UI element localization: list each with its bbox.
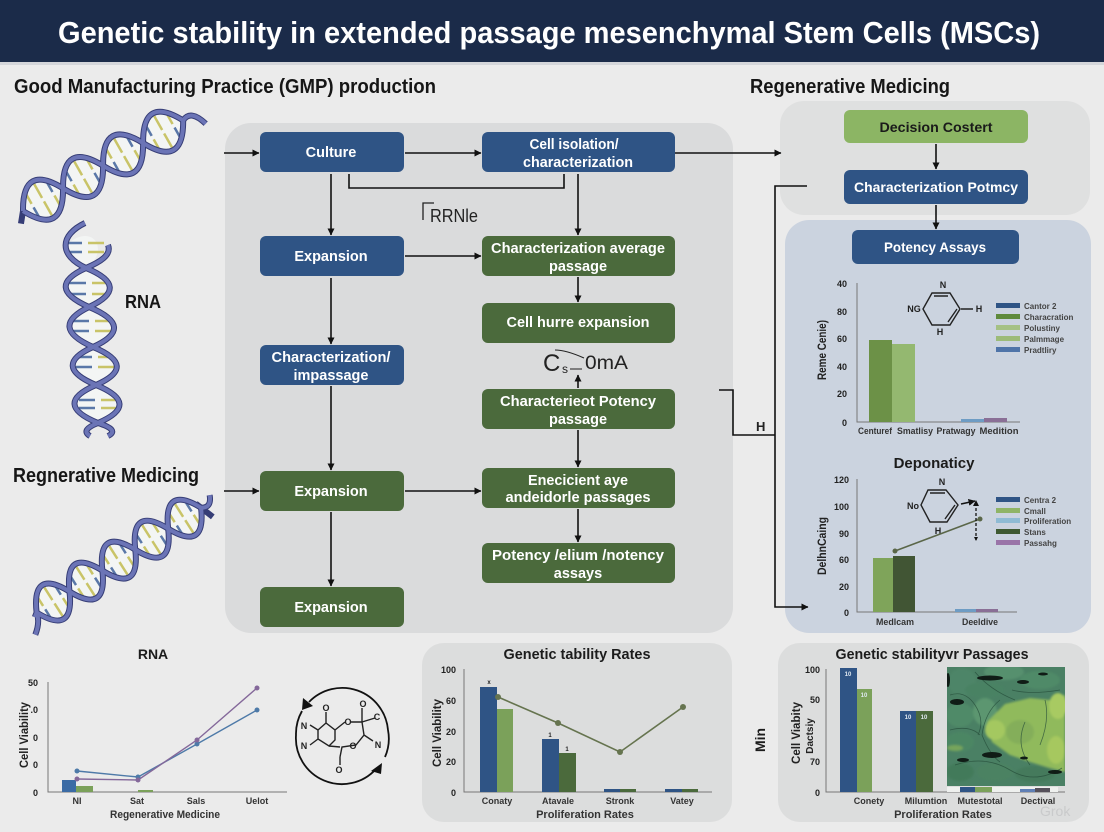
bar chart: passages: Milumtion — [905, 796, 947, 806]
bar chart: potency: 20 — [837, 389, 847, 399]
arrows: trend markers — [892, 500, 982, 554]
step: Cell isolation — [482, 132, 675, 172]
molecule: ring one: NG — [907, 304, 921, 314]
step: Characterization average passage — [482, 236, 675, 276]
bar chart: deponaticy: Medlcam — [876, 617, 914, 627]
step: Culture — [260, 132, 404, 172]
bar chart: rates: 100 — [441, 665, 456, 675]
step: Cell isolation: Cell isolation/ — [530, 137, 618, 153]
bar chart: deponaticy: DelhnCaing — [815, 517, 829, 575]
bar chart: passages: 70 — [810, 757, 820, 767]
line chart: RNA cell viability: 50 — [28, 678, 38, 688]
panel: genetic stability passages — [778, 643, 1089, 822]
label: RRNle: RRNle — [430, 206, 478, 226]
legend: deponaticy: Passahg — [1024, 539, 1057, 548]
step: Characterization impassage: Characterization/ — [272, 350, 390, 366]
legend: potency: Pradtliry — [1024, 346, 1057, 355]
step: Characterization average passage: passage — [549, 259, 607, 275]
bar chart: rates: Proliferation Rates — [536, 809, 634, 821]
legend: potency: Characration — [1024, 313, 1073, 322]
bar chart: passages: Dactsiy — [805, 718, 816, 754]
heading: regenerative medicine right: Regenerative Medicing — [750, 76, 950, 98]
bar chart: potency: Reme Cenie) — [815, 320, 829, 380]
bar chart: rates: x — [487, 680, 491, 686]
step: Enecicient passages: Enecicient aye — [528, 473, 628, 489]
step: Enecicient passages — [482, 468, 675, 508]
label: RNA: RNA — [125, 292, 161, 312]
box: Characterization Potmcy: Characterization Potmcy — [854, 179, 1018, 195]
bar chart: potency: 0 — [842, 418, 847, 428]
bar chart: rates: 60 — [446, 696, 456, 706]
step: Characterization impassage — [260, 345, 404, 385]
bar chart: deponaticy: 0 — [844, 608, 849, 618]
bar chart: potency: 40 — [837, 362, 847, 372]
step: Potency assays: Potency /elium /notency — [492, 548, 664, 564]
bar chart: rates: Conaty — [482, 796, 512, 806]
legend: deponaticy: Centra 2 — [1024, 496, 1057, 505]
legend: potency: Palmmage — [1024, 335, 1065, 344]
bar chart: potency: Smatlisy — [897, 426, 933, 436]
bar chart: passages: Mutestotal — [958, 796, 1002, 806]
bar chart: potency: Pratwagy — [936, 426, 976, 436]
bar chart: deponaticy — [815, 475, 1071, 627]
heading: RNA chart: RNA — [138, 646, 168, 662]
step: Expansion blue: Expansion — [294, 249, 368, 265]
line chart: RNA cell viability — [17, 678, 287, 821]
bar chart: rates: Cell Viability — [430, 699, 444, 767]
bar chart: passages: 50 — [810, 695, 820, 705]
bar chart: deponaticy: Deeldive — [962, 617, 998, 627]
molecule: ring one: N — [940, 280, 946, 290]
line chart: RNA cell viability: .0 — [30, 705, 38, 715]
heading: Genetic tability Rates: Genetic tability Rates — [504, 646, 650, 663]
molecule: ring one — [907, 280, 982, 337]
molecule: ring two: No — [907, 501, 919, 511]
bar chart: passages: 100 — [805, 665, 820, 675]
bar chart: passages: Cell Viabity — [789, 702, 803, 764]
bar chart: passages: 10 — [905, 715, 912, 721]
line chart: RNA cell viability: Cell Viability — [17, 702, 31, 768]
bar chart: passages: 10 — [921, 715, 928, 721]
bar chart: potency: 60 — [837, 334, 847, 344]
legend: deponaticy — [996, 496, 1071, 548]
step: Characterieot Potency passage: Characterieot Potency — [500, 394, 656, 410]
bar chart: rates: 0 — [451, 788, 456, 798]
bar chart: deponaticy: 120 — [834, 475, 849, 485]
molecule: ring two: N — [939, 477, 945, 487]
step: Cell hurre expansion: Cell hurre expansion — [506, 315, 650, 331]
step: Potency assays: assays — [554, 566, 602, 582]
bar chart: rates: 20 — [446, 727, 456, 737]
label: Cs-0mA: 0mA — [585, 353, 628, 374]
molecule: ring two: H — [935, 526, 941, 536]
step: Characterieot Potency passage: passage — [549, 412, 607, 428]
line chart: RNA cell viability: Uelot — [246, 796, 268, 806]
panel: manufacturing flowchart — [225, 123, 733, 633]
legend: potency: Cantor 2 — [1024, 302, 1057, 311]
icon: DNA helix bottom — [15, 483, 224, 636]
bar chart: deponaticy: 90 — [839, 529, 849, 539]
box: Potency Assays: Potency Assays — [884, 239, 986, 255]
step: Expansion blue — [260, 236, 404, 276]
icon: circular molecule: O — [344, 717, 352, 727]
legend: deponaticy: Stans — [1024, 528, 1046, 537]
panel: regenerative decision — [780, 101, 1090, 215]
icon: circular molecule — [296, 688, 389, 784]
label: Cs-0mA: C — [543, 350, 560, 377]
legend: deponaticy: Cmall — [1024, 507, 1046, 516]
line chart: RNA cell viability: 0 — [33, 760, 38, 770]
bar chart: potency — [815, 279, 1073, 436]
panel: genetic stability rates — [422, 643, 732, 822]
bar chart: potency: 40 — [837, 279, 847, 289]
title banner: Genetic stability in extended passage mesenchymal Stem Cells (MSCs) — [58, 15, 1040, 50]
heading: regenerative medicine left: Regnerative Medicing — [13, 465, 199, 487]
molecule: ring one: H — [937, 327, 943, 337]
bar chart: deponaticy: 20 — [839, 582, 849, 592]
bar chart: rates: 1 — [548, 733, 552, 739]
bar chart: rates: Stronk — [606, 796, 635, 806]
step: Expansion green — [260, 471, 404, 511]
line chart: RNA cell viability: 0 — [33, 733, 38, 743]
icon: circular molecule: O — [349, 741, 357, 751]
step: Cell hurre expansion — [482, 303, 675, 343]
bar chart: rates: 1 — [565, 747, 569, 753]
legend: potency: Polustiny — [1024, 324, 1061, 333]
molecule: ring two — [907, 477, 958, 536]
label: Cs-0mA: s — [562, 362, 568, 376]
bar chart: passages: Conety — [854, 796, 884, 806]
step: Enecicient passages: andeidorle passages — [506, 490, 650, 506]
arrows: flowchart connectors — [224, 144, 936, 607]
box: Characterization Potmcy — [844, 170, 1028, 204]
bar chart: rates — [430, 665, 712, 821]
bar chart: passages: Dectival — [1021, 796, 1055, 806]
line chart: RNA cell viability: NI — [72, 796, 82, 806]
line chart: RNA cell viability: 0 — [33, 788, 38, 798]
molecule: ring one: H — [976, 304, 982, 314]
step: Characterieot Potency passage — [482, 389, 675, 429]
bar chart: passages: 10 — [861, 693, 868, 699]
box: Potency Assays — [852, 230, 1019, 264]
legend: potency — [996, 302, 1073, 355]
icon: DNA helix top — [6, 93, 209, 233]
label: Min rotated: Min — [752, 728, 768, 752]
bar chart: passages: Proliferation Rates — [894, 809, 992, 821]
icon: circular molecule: O — [322, 703, 330, 713]
line chart: RNA cell viability: Sals — [187, 796, 205, 806]
bar chart: potency: 80 — [837, 307, 847, 317]
bar chart: deponaticy: 100 — [834, 502, 849, 512]
image: green cell micrograph — [946, 664, 1067, 786]
label: Cs-0mA — [543, 350, 628, 377]
line chart: RNA cell viability: Sat — [130, 796, 144, 806]
box: Decision Costert: Decision Costert — [880, 119, 993, 135]
bar chart: potency: Medition — [980, 426, 1018, 436]
bar chart: rates: 20 — [446, 757, 456, 767]
heading: Genetic stabilityvr Passages: Genetic stabilityvr Passages — [836, 646, 1028, 663]
step: Expansion final — [260, 587, 404, 627]
icon: circular molecule: N — [301, 721, 307, 731]
bar chart: passages: 10 — [845, 672, 852, 678]
icon: circular molecule: N — [375, 740, 381, 750]
step: Cell isolation: characterization — [523, 155, 633, 171]
bar chart: passages: 0 — [815, 788, 820, 798]
step: Characterization average passage: Characterization average — [491, 241, 665, 257]
bar chart: passages — [789, 665, 1065, 821]
legend: deponaticy: Proliferation — [1024, 517, 1071, 526]
step: Culture: Culture — [306, 145, 356, 161]
watermark: Grok: Grok — [1040, 803, 1071, 819]
step: Expansion final: Expansion — [294, 600, 368, 616]
icon: RNA helix vertical — [66, 223, 120, 436]
heading: GMP production: Good Manufacturing Practice (GMP) production — [14, 76, 436, 98]
icon: circular molecule: O — [335, 765, 343, 775]
step: Expansion green: Expansion — [294, 484, 368, 500]
icon: circular molecule: C — [374, 712, 381, 722]
title banner — [0, 0, 1104, 65]
bar chart: rates: Vatey — [670, 796, 694, 806]
bar chart: potency: Centuref — [858, 426, 893, 436]
label: H: H — [756, 419, 765, 434]
step: Characterization impassage: impassage — [294, 368, 368, 384]
line chart: RNA cell viability: Regenerative Medicine — [110, 809, 220, 821]
icon: circular molecule: O — [359, 699, 367, 709]
icon: circular molecule: N — [301, 741, 307, 751]
box: Decision Costert — [844, 110, 1028, 143]
bar chart: deponaticy: 60 — [839, 555, 849, 565]
step: Potency assays — [482, 543, 675, 583]
bar chart: rates: Atavale — [542, 796, 574, 806]
panel: potency assays — [17, 144, 1091, 822]
heading: Deponaticy: Deponaticy — [894, 455, 975, 472]
